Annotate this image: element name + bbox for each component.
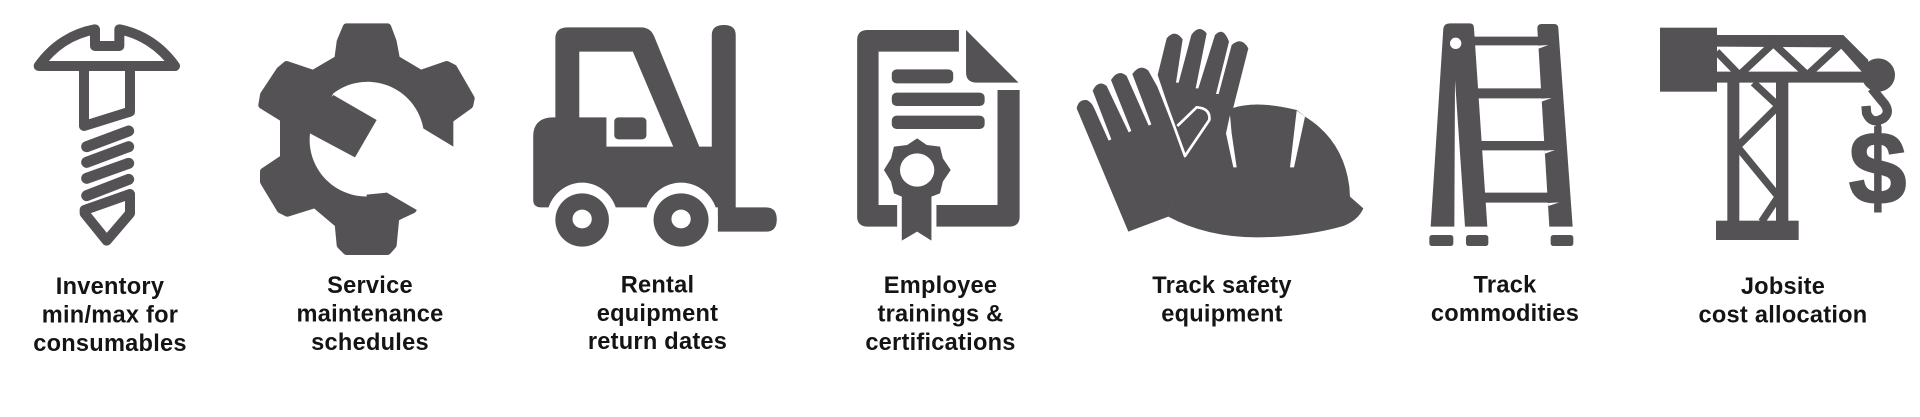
label: inventory: consumables <box>33 331 187 357</box>
label: safety: equipment <box>1161 302 1283 328</box>
panel: inventory <box>33 29 187 357</box>
panel: employee <box>857 30 1020 356</box>
label: inventory: Inventory <box>56 274 164 300</box>
icon: tower crane lifting dollar <box>1660 28 1906 240</box>
label: jobsite: cost allocation <box>1699 302 1867 328</box>
panel: service <box>262 27 493 356</box>
icon: forklift <box>533 25 777 257</box>
icon: screw <box>39 29 175 241</box>
panel: commodities <box>1429 23 1579 327</box>
icon: gloves and hard hat <box>1077 29 1363 237</box>
panel: jobsite <box>1660 28 1906 329</box>
label: service: maintenance <box>296 302 444 328</box>
label: employee: trainings & <box>878 302 1003 328</box>
label: rental: equipment <box>597 301 718 327</box>
label: service: schedules <box>311 330 429 356</box>
panel: safety <box>1077 29 1363 328</box>
label: safety: Track safety <box>1152 273 1292 299</box>
label: service: Service <box>327 273 413 299</box>
label: rental: Rental <box>621 272 694 298</box>
icon: dollar sign: $ <box>1849 110 1906 226</box>
panel: rental <box>533 25 777 355</box>
label: inventory: min/max for <box>42 302 178 328</box>
label: employee: certifications <box>865 330 1016 356</box>
label: employee: Employee <box>884 273 997 299</box>
label: rental: return dates <box>588 329 727 355</box>
icon: certificate <box>857 30 1020 241</box>
label: commodities: commodities <box>1431 301 1579 327</box>
icon: ladder <box>1429 23 1573 246</box>
icon: gear with wrench <box>262 27 493 251</box>
label: commodities: Track <box>1474 272 1537 298</box>
label: jobsite: Jobsite <box>1741 274 1825 300</box>
